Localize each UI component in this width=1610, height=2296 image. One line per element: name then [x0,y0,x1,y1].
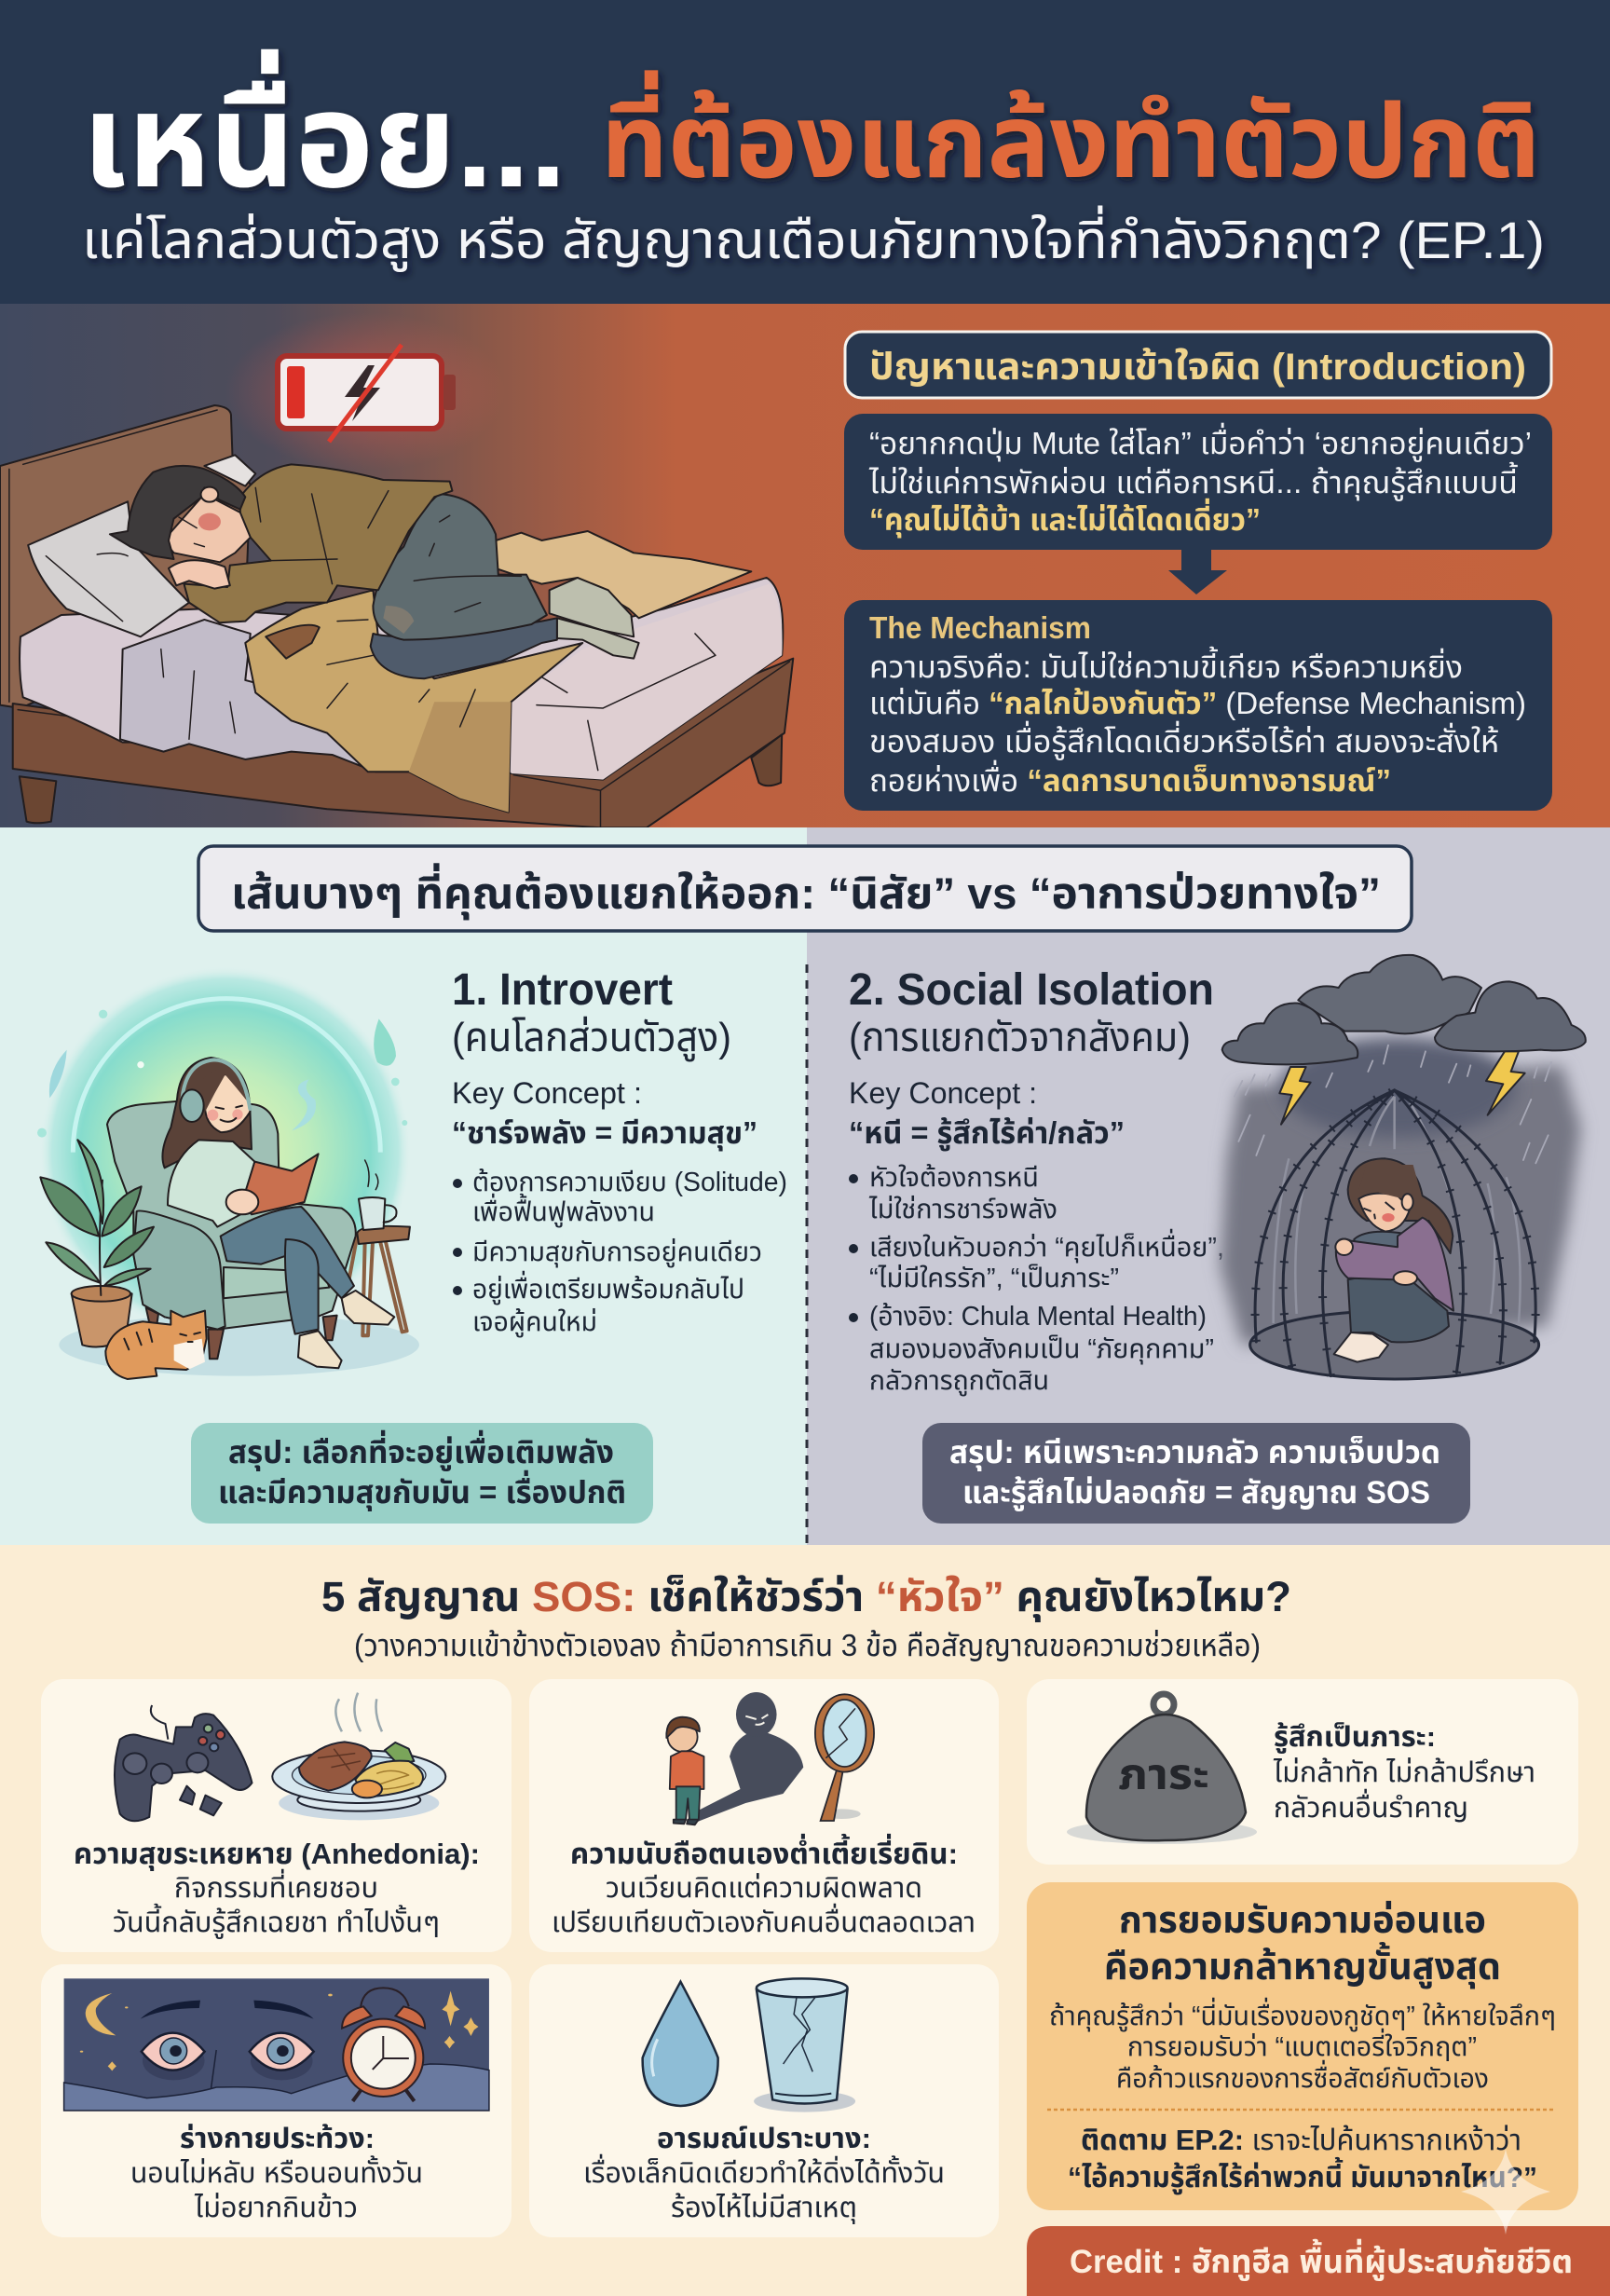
subtitle: แค่โลกส่วนตัวสูง หรือ สัญญาณเตือนภัยทางใจที่กำลังวิกฤต? (EP.1) [82,205,1545,272]
card: body protests: ร่างกายประท้วง: [180,2124,375,2154]
key concept: introvert [452,1076,757,1152]
callout: accepting weakness: คือก้าวแรกของการซื่อสัตย์กับตัวเอง [1116,2059,1489,2094]
heading: introduction [845,332,1551,398]
icon: tired eyes at night with alarm clock [64,1978,489,2111]
illustration: woman in barbed wire cage under storm [1221,955,1586,1379]
icon: water drop and cracked glass [643,1978,855,2112]
card: anhedonia: กิจกรรมที่เคยชอบ [174,1868,378,1904]
heading: 5 SOS signals: (วางความแข้าข้างตัวเองลง ถ้ามีอาการเกิน 3 ข้อ คือสัญญาณขอความช่วยเหลือ) [354,1628,1261,1662]
icon: boy, dark shadow and cracked mirror [666,1692,874,1824]
icon: broken controller and food plate [115,1693,445,1821]
callout: accepting weakness: ถ้าคุณรู้สึกว่า “นี่มันเรื่องของกูชัดๆ” ให้หายใจลึกๆ [1049,1997,1556,2032]
bullet list: introvert [453,1168,787,1338]
card: low self-esteem: เปรียบเทียบตัวเองกับคนอื่นตลอดเวลา [552,1903,976,1938]
text block: the mechanism [844,600,1552,811]
card: body protests: ไม่อยากกินข้าว [194,2193,358,2223]
key concept: introvert: Key Concept : [452,1076,642,1110]
heading: introduction: ปัญหาและความเข้าใจผิด (Introduction) [869,346,1526,388]
bullet list: social isolation: สมองมองสังคมเป็น “ภัยคุกคาม” [869,1334,1214,1364]
heading: 5 SOS signals [321,1573,1291,1662]
heading: introvert [452,965,731,1062]
text block: misunderstanding: “คุณไม่ได้บ้า และไม่ได้โดดเดี่ยว” [869,498,1261,539]
callout: accepting weakness: ติดตาม EP.2: เราจะไปค้นหารากเหง้าว่า [1081,2124,1521,2156]
callout: accepting weakness: “ไอ้ความรู้สึกไร้ค่าพวกนี้ มันมาจากไหน?” [1068,2156,1537,2194]
bullet list: introvert: ต้องการความเงียบ (Solitude) [472,1168,787,1197]
bullet list: introvert: อยู่เพื่อเตรียมพร้อมกลับไป [472,1270,744,1305]
key concept: social isolation: Key Concept : [849,1076,1037,1110]
title: orange part: ที่ต้องแกล้งทำตัวปกติ [601,70,1540,199]
hero panel: exhausted person and introduction [0,304,1610,827]
card: low self-esteem: วนเวียนคิดแต่ความผิดพลาด [606,1873,922,1904]
card: low self-esteem: ความนับถือตนเองต่ำเตี้ยเรี่ยดิน: [570,1833,958,1870]
text block: the mechanism: ความจริงคือ: มันไม่ใช่ความขี้เกียจ หรือความหยิ่ง [869,646,1463,684]
summary: introvert: สรุป: เลือกที่จะอยู่เพื่อเติมพลัง [228,1429,614,1471]
text block: the mechanism: ถอยห่างเพื่อ “ลดการบาดเจ็บทางอารมณ์” [869,759,1391,798]
card: fragile emotions [529,1964,999,2237]
text block: the mechanism: ของสมอง เมื่อรู้สึกโดดเดี่ยวหรือไร้ค่า สมองจะสั่งให้ [869,720,1499,760]
SOS section [0,1545,1610,2296]
header banner [0,0,1610,304]
heading: social isolation [849,965,1214,1060]
heading: the thin line [198,846,1412,931]
summary: social isolation [922,1423,1470,1524]
bullet list: introvert: เจอผู้คนใหม่ [472,1307,597,1338]
illustration: person curled up on bed [0,405,793,827]
card: anhedonia: ความสุขระเหยหาย (Anhedonia): [74,1838,480,1871]
heading: social isolation: (การแยกตัวจากสังคม) [849,1015,1191,1060]
heading: 5 SOS signals: 5 สัญญาณ SOS: เช็คให้ชัวร์ว่า “หัวใจ” คุณยังไหวไหม? [321,1573,1291,1622]
callout: accepting weakness: การยอมรับความอ่อนแอ [1119,1899,1486,1941]
bullet list: social isolation: ไม่ใช่การชาร์จพลัง [868,1195,1057,1224]
credit bar: Credit : ฮักทูฮีล พื้นที่ผู้ประสบภัยชีวิต [1070,2238,1573,2281]
key concept: introvert: “ชาร์จพลัง = มีความสุข” [452,1115,757,1152]
card: anhedonia [41,1679,512,1952]
icon: heavy stone labeled burden: ภาระ [1118,1750,1209,1798]
icon: broken battery [225,312,505,471]
card: body protests: นอนไม่หลับ หรือนอนทั้งวัน [130,2155,423,2189]
summary: social isolation: และรู้สึกไม่ปลอดภัย = สัญญาณ SOS [962,1475,1430,1511]
card: feeling like a burden: กลัวคนอื่นรำคาญ [1274,1788,1468,1824]
card: fragile emotions: อารมณ์เปราะบาง: [657,2124,871,2154]
title: white part: เหนื่อย... [82,48,566,215]
summary: social isolation: สรุป: หนีเพราะความกลัว ความเจ็บปวด [949,1435,1440,1471]
icon: heavy stone labeled burden [1067,1694,1257,1844]
card: low self-esteem [529,1679,999,1952]
bullet list: social isolation: เสียงในหัวบอกว่า “คุยไปก็เหนื่อย”, [869,1228,1224,1263]
card: feeling like a burden: ไม่กล้าทัก ไม่กล้าปรึกษา [1273,1757,1535,1788]
key concept: social isolation: “หนี = รู้สึกไร้ค่า/กลัว” [849,1115,1125,1152]
card: body protests [41,1964,512,2237]
card: anhedonia: วันนี้กลับรู้สึกเฉยชา ทำไปงั้นๆ [113,1903,440,1939]
callout: accepting weakness: การยอมรับว่า “แบตเตอรี่ใจวิกฤต” [1127,2028,1477,2062]
text block: misunderstanding [844,414,1552,550]
key concept: social isolation [849,1076,1125,1152]
heading: introvert: (คนโลกส่วนตัวสูง) [452,1015,731,1062]
text block: misunderstanding: ไม่ใช่แค่การพักผ่อน แต่คือการหนี... ถ้าคุณรู้สึกแบบนี้ [868,461,1518,501]
comparison section: trait vs illness [0,827,1610,1547]
arrow down [1168,550,1227,594]
summary: introvert: และมีความสุขกับมัน = เรื่องปกติ [218,1469,626,1511]
bullet list: social isolation: กลัวการถูกตัดสิน [869,1366,1049,1397]
text block: the mechanism: แต่มันคือ “กลไกป้องกันตัว” (Defense Mechanism) [869,686,1526,720]
callout: accepting weakness [1027,1882,1578,2210]
card: fragile emotions: เรื่องเล็กนิดเดียวทำให้ดิ่งได้ทั้งวัน [583,2153,945,2189]
bullet list: introvert: มีความสุขกับการอยู่คนเดียว [472,1237,762,1268]
summary: introvert [191,1423,653,1524]
card: feeling like a burden [1027,1679,1578,1865]
heading: social isolation: 2. Social Isolation [849,965,1214,1015]
card: fragile emotions: ร้องไห้ไม่มีสาเหตุ [671,2193,857,2224]
bullet list: social isolation: “ไม่มีใครรัก”, “เป็นภาระ” [869,1264,1119,1293]
bullet list: social isolation: (อ้างอิง: Chula Mental Health) [869,1302,1207,1332]
icon: sparkle watermark [1461,2149,1550,2234]
credit bar [1027,2226,1610,2296]
bullet list: social isolation [849,1163,1224,1397]
bullet list: social isolation: หัวใจต้องการหนี [869,1163,1039,1193]
heading: the thin line: เส้นบางๆ ที่คุณต้องแยกให้ออก: “นิสัย” vs “อาการป่วยทางใจ” [231,863,1381,920]
text block: misunderstanding: “อยากกดปุ่ม Mute ใส่โลก” เมื่อคำว่า ‘อยากอยู่คนเดียว’ [869,422,1532,462]
heading: introvert: 1. Introvert [452,965,673,1015]
card: feeling like a burden: รู้สึกเป็นภาระ: [1274,1722,1436,1754]
text block: the mechanism: The Mechanism [869,610,1091,645]
bullet list: introvert: เพื่อฟื้นฟูพลังงาน [472,1193,655,1228]
callout: accepting weakness: คือความกล้าหาญขั้นสูงสุด [1104,1941,1501,1989]
illustration: woman reading in armchair [37,966,419,1379]
